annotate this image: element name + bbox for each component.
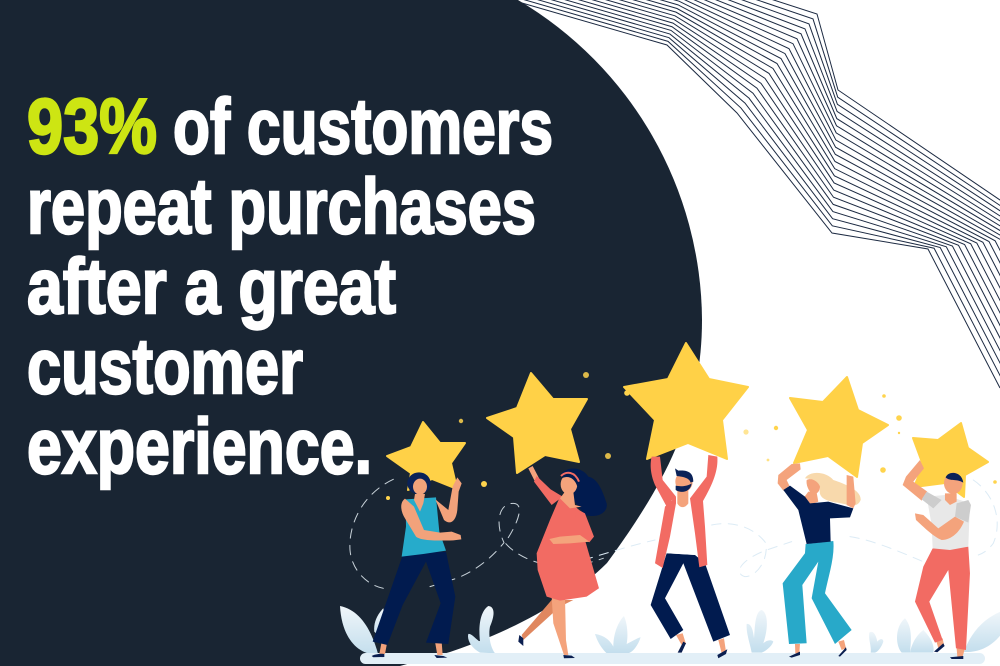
person 4 hair (805, 473, 861, 505)
person 5 trousers (915, 547, 970, 650)
person 4 feet (795, 640, 846, 653)
person 2 hair (562, 468, 607, 516)
person 4 top (783, 486, 853, 544)
headline line 3: after a great (27, 242, 396, 330)
headline (27, 82, 553, 490)
person 5 raised arm (903, 460, 927, 501)
person 2 arms (528, 466, 590, 544)
person 1 head (407, 472, 431, 494)
star 3 (624, 343, 748, 459)
person 5 with star (903, 423, 988, 659)
person 5 shirt (927, 495, 970, 550)
star 5 (913, 423, 988, 497)
star 4 (790, 377, 888, 477)
ground strip (360, 653, 985, 664)
person 3 trousers (651, 553, 730, 642)
headline line 2: repeat purchases (27, 162, 536, 250)
person 3 head (677, 490, 688, 507)
person 1 trousers (373, 552, 455, 645)
person 1 arms (401, 477, 462, 541)
headline line 4: customer (27, 322, 303, 410)
person 2 head (560, 492, 582, 508)
wave line pattern (522, 0, 1000, 388)
person 2 dress (537, 497, 599, 601)
dashed paths (350, 479, 997, 588)
person 5 sleeves (922, 492, 971, 523)
headline line 5: experience. (27, 402, 372, 490)
highlighted stat: 93% (27, 82, 157, 170)
person 3 shirt (667, 498, 696, 555)
headline line 1: of customers (173, 82, 553, 170)
person 4 trousers (783, 541, 852, 644)
dark circular background panel (0, 0, 702, 666)
star 1 (387, 422, 465, 490)
person 5 front arm (915, 513, 964, 540)
person 5 feet (936, 638, 965, 657)
person 1 with star (372, 422, 465, 658)
person 3 raised arms (651, 455, 717, 507)
person 3 jacket (655, 497, 707, 568)
yellow sparkle dots (386, 372, 997, 500)
person 5 head (945, 493, 957, 505)
dashed loop centre (430, 503, 603, 587)
star 2 (487, 373, 587, 473)
dashed path pale (583, 480, 997, 577)
person 3 with star (624, 343, 748, 658)
plants left (340, 606, 641, 655)
person 2 with star (487, 373, 607, 658)
person 4 with star (778, 377, 888, 658)
person 2 legs (522, 600, 573, 640)
person 3 feet (676, 633, 726, 653)
person 4 head (803, 492, 818, 505)
plants (340, 606, 1000, 655)
person 4 arms (778, 463, 856, 508)
dashed loop left (350, 479, 393, 588)
person 1 shirt (402, 497, 446, 557)
person 1 legs (379, 642, 443, 655)
person 2 hand (549, 535, 589, 544)
plants right (747, 610, 1000, 653)
